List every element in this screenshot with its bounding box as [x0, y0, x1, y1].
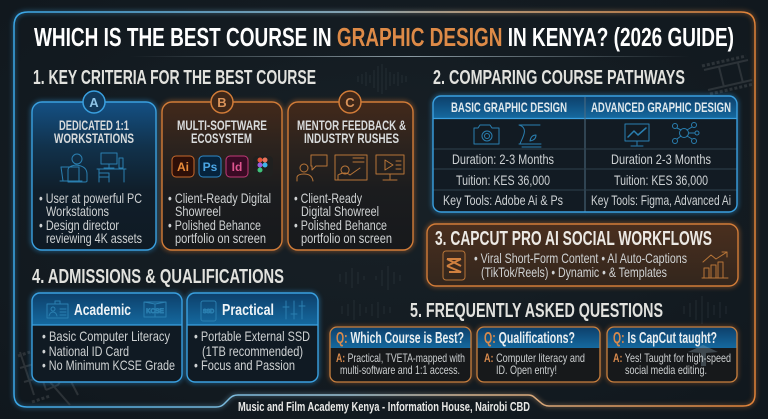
answer 1: multi-software and 1:1 access. — [340, 363, 460, 377]
footer: Music and Film Academy Kenya - Information House, Nairobi CBD — [238, 399, 530, 414]
table rows: Duration 2-3 Months — [611, 151, 711, 167]
table headers — [451, 99, 731, 115]
panel: FAQ 1 — [330, 327, 471, 382]
bullet list C: Digital Showreel — [301, 203, 379, 219]
decoration: film strip top right — [702, 56, 754, 94]
answer 3 — [613, 351, 731, 377]
question 1: Q: Which Course is Best? — [336, 330, 464, 347]
bullet list C — [294, 190, 392, 246]
table rows: Duration: 2-3 Months — [452, 151, 554, 167]
panel: criterion B — [162, 91, 282, 250]
badge B — [211, 91, 233, 113]
answer 1 — [336, 351, 465, 377]
table rows: Tuition: KES 36,000 — [614, 172, 708, 188]
badge A: A — [89, 95, 99, 110]
icons: software logos: Id — [232, 160, 242, 174]
panel: FAQ 3 — [607, 327, 737, 382]
badge C: C — [345, 95, 355, 110]
icons: software logos: Ps — [203, 160, 218, 174]
answer 3: A: Yes! Taught for high-speed — [613, 351, 731, 365]
decoration: film strip bottom left — [18, 348, 78, 405]
capcut features — [474, 250, 687, 280]
academic list: • Basic Computer Literacy — [42, 328, 170, 344]
bullet list B: • Client-Ready Digital — [168, 190, 271, 206]
badge B: B — [217, 95, 227, 110]
question 2: Q: Qualifications? — [484, 330, 575, 347]
decoration: sound waves — [340, 64, 726, 324]
arrow mark — [688, 345, 718, 366]
icons: mentor feedback — [297, 155, 404, 181]
bullet list C: • Client-Ready — [294, 190, 362, 206]
title divider — [130, 56, 690, 57]
panel: comparison table — [433, 96, 737, 212]
heading: section 5: 5. FREQUENTLY ASKED QUESTIONS — [410, 299, 663, 322]
icons: monitor and network — [625, 122, 699, 146]
bullet list A: reviewing 4K assets — [46, 230, 142, 246]
heading: section 4: 4. ADMISSIONS & QUALIFICATIONS — [32, 265, 284, 288]
icon: growth chart — [702, 252, 728, 278]
answer 2: ID. Open entry! — [496, 363, 557, 377]
panel: CapCut workflows — [427, 224, 738, 286]
practical list: • Portable External SSD — [194, 328, 310, 344]
capcut features: (TikTok/Reels) • Dynamic • & Templates — [481, 264, 667, 280]
table rows: Tuition: KES 36,000 — [456, 172, 550, 188]
academic list: • National ID Card — [42, 343, 129, 359]
icon: KCSE book: KCSE — [146, 308, 165, 315]
answer 3: social media editing. — [625, 363, 707, 377]
icon: KCSE book — [144, 302, 166, 317]
heading: section 1: 1. KEY CRITERIA FOR THE BEST COURSE — [33, 66, 316, 89]
label: academic: Academic — [74, 302, 131, 319]
icon: sliders — [283, 301, 305, 319]
icon: CapCut phone — [443, 251, 465, 280]
academic list: • No Minimum KCSE Grade — [42, 357, 175, 373]
icon: ID badge — [47, 301, 68, 318]
badge C — [339, 91, 361, 113]
panel: academic requirements — [32, 293, 182, 382]
answer 2: A: Computer literacy and — [484, 351, 585, 365]
academic list — [42, 328, 175, 373]
card title B — [177, 117, 267, 146]
panel: criterion A — [32, 91, 156, 250]
practical list: (1TB recommended) — [202, 343, 303, 359]
answer 2 — [484, 351, 585, 377]
bullet list B — [168, 190, 271, 246]
bullet list A — [39, 190, 142, 246]
bullet list A: Workstations — [46, 203, 109, 219]
practical list — [194, 328, 310, 373]
card title C: MENTOR FEEDBACK & — [297, 117, 406, 133]
card title A — [54, 117, 134, 146]
label: practical: Practical — [222, 302, 274, 319]
card title A: DEDICATED 1:1 — [59, 117, 129, 133]
card title A: WORKSTATIONS — [54, 130, 134, 146]
card title B: MULTI-SOFTWARE — [177, 117, 267, 133]
badge A — [83, 91, 105, 113]
icons: software logos: Ai — [177, 160, 189, 174]
bullet list C: portfolio on screen — [301, 230, 392, 246]
table rows: Key Tools: Adobe Ai & Ps — [443, 192, 563, 208]
card title C — [297, 117, 406, 146]
panel: practical requirements — [187, 293, 318, 382]
icons: user at workstation and desk — [60, 153, 126, 182]
bullet list A: • Design director — [39, 217, 119, 233]
bullet list B: • Polished Behance — [168, 217, 261, 233]
bullet list B: Showreel — [175, 203, 221, 219]
bullet list A: • User at powerful PC — [39, 190, 142, 206]
panel: FAQ 2 — [477, 327, 600, 382]
bullet list B: portfolio on screen — [175, 230, 266, 246]
icon: SSD: SSD — [203, 309, 214, 315]
practical list: • Focus and Passion — [194, 357, 295, 373]
table rows — [443, 151, 731, 208]
card title B: ECOSYSTEM — [191, 130, 252, 146]
icons: camera and pen tool — [474, 125, 541, 147]
icons: software logos — [172, 156, 273, 177]
card title C: INDUSTRY RUSHES — [304, 130, 399, 146]
table headers: BASIC GRAPHIC DESIGN — [451, 99, 567, 115]
panel: criterion C — [288, 91, 413, 250]
bullet list C: • Polished Behance — [294, 217, 387, 233]
capcut features: • Viral Short-Form Content • AI Auto-Captions — [474, 250, 687, 266]
answer 1: A: Practical, TVETA-mapped with — [336, 351, 465, 365]
question 3: Q: Is CapCut taught? — [613, 330, 717, 347]
